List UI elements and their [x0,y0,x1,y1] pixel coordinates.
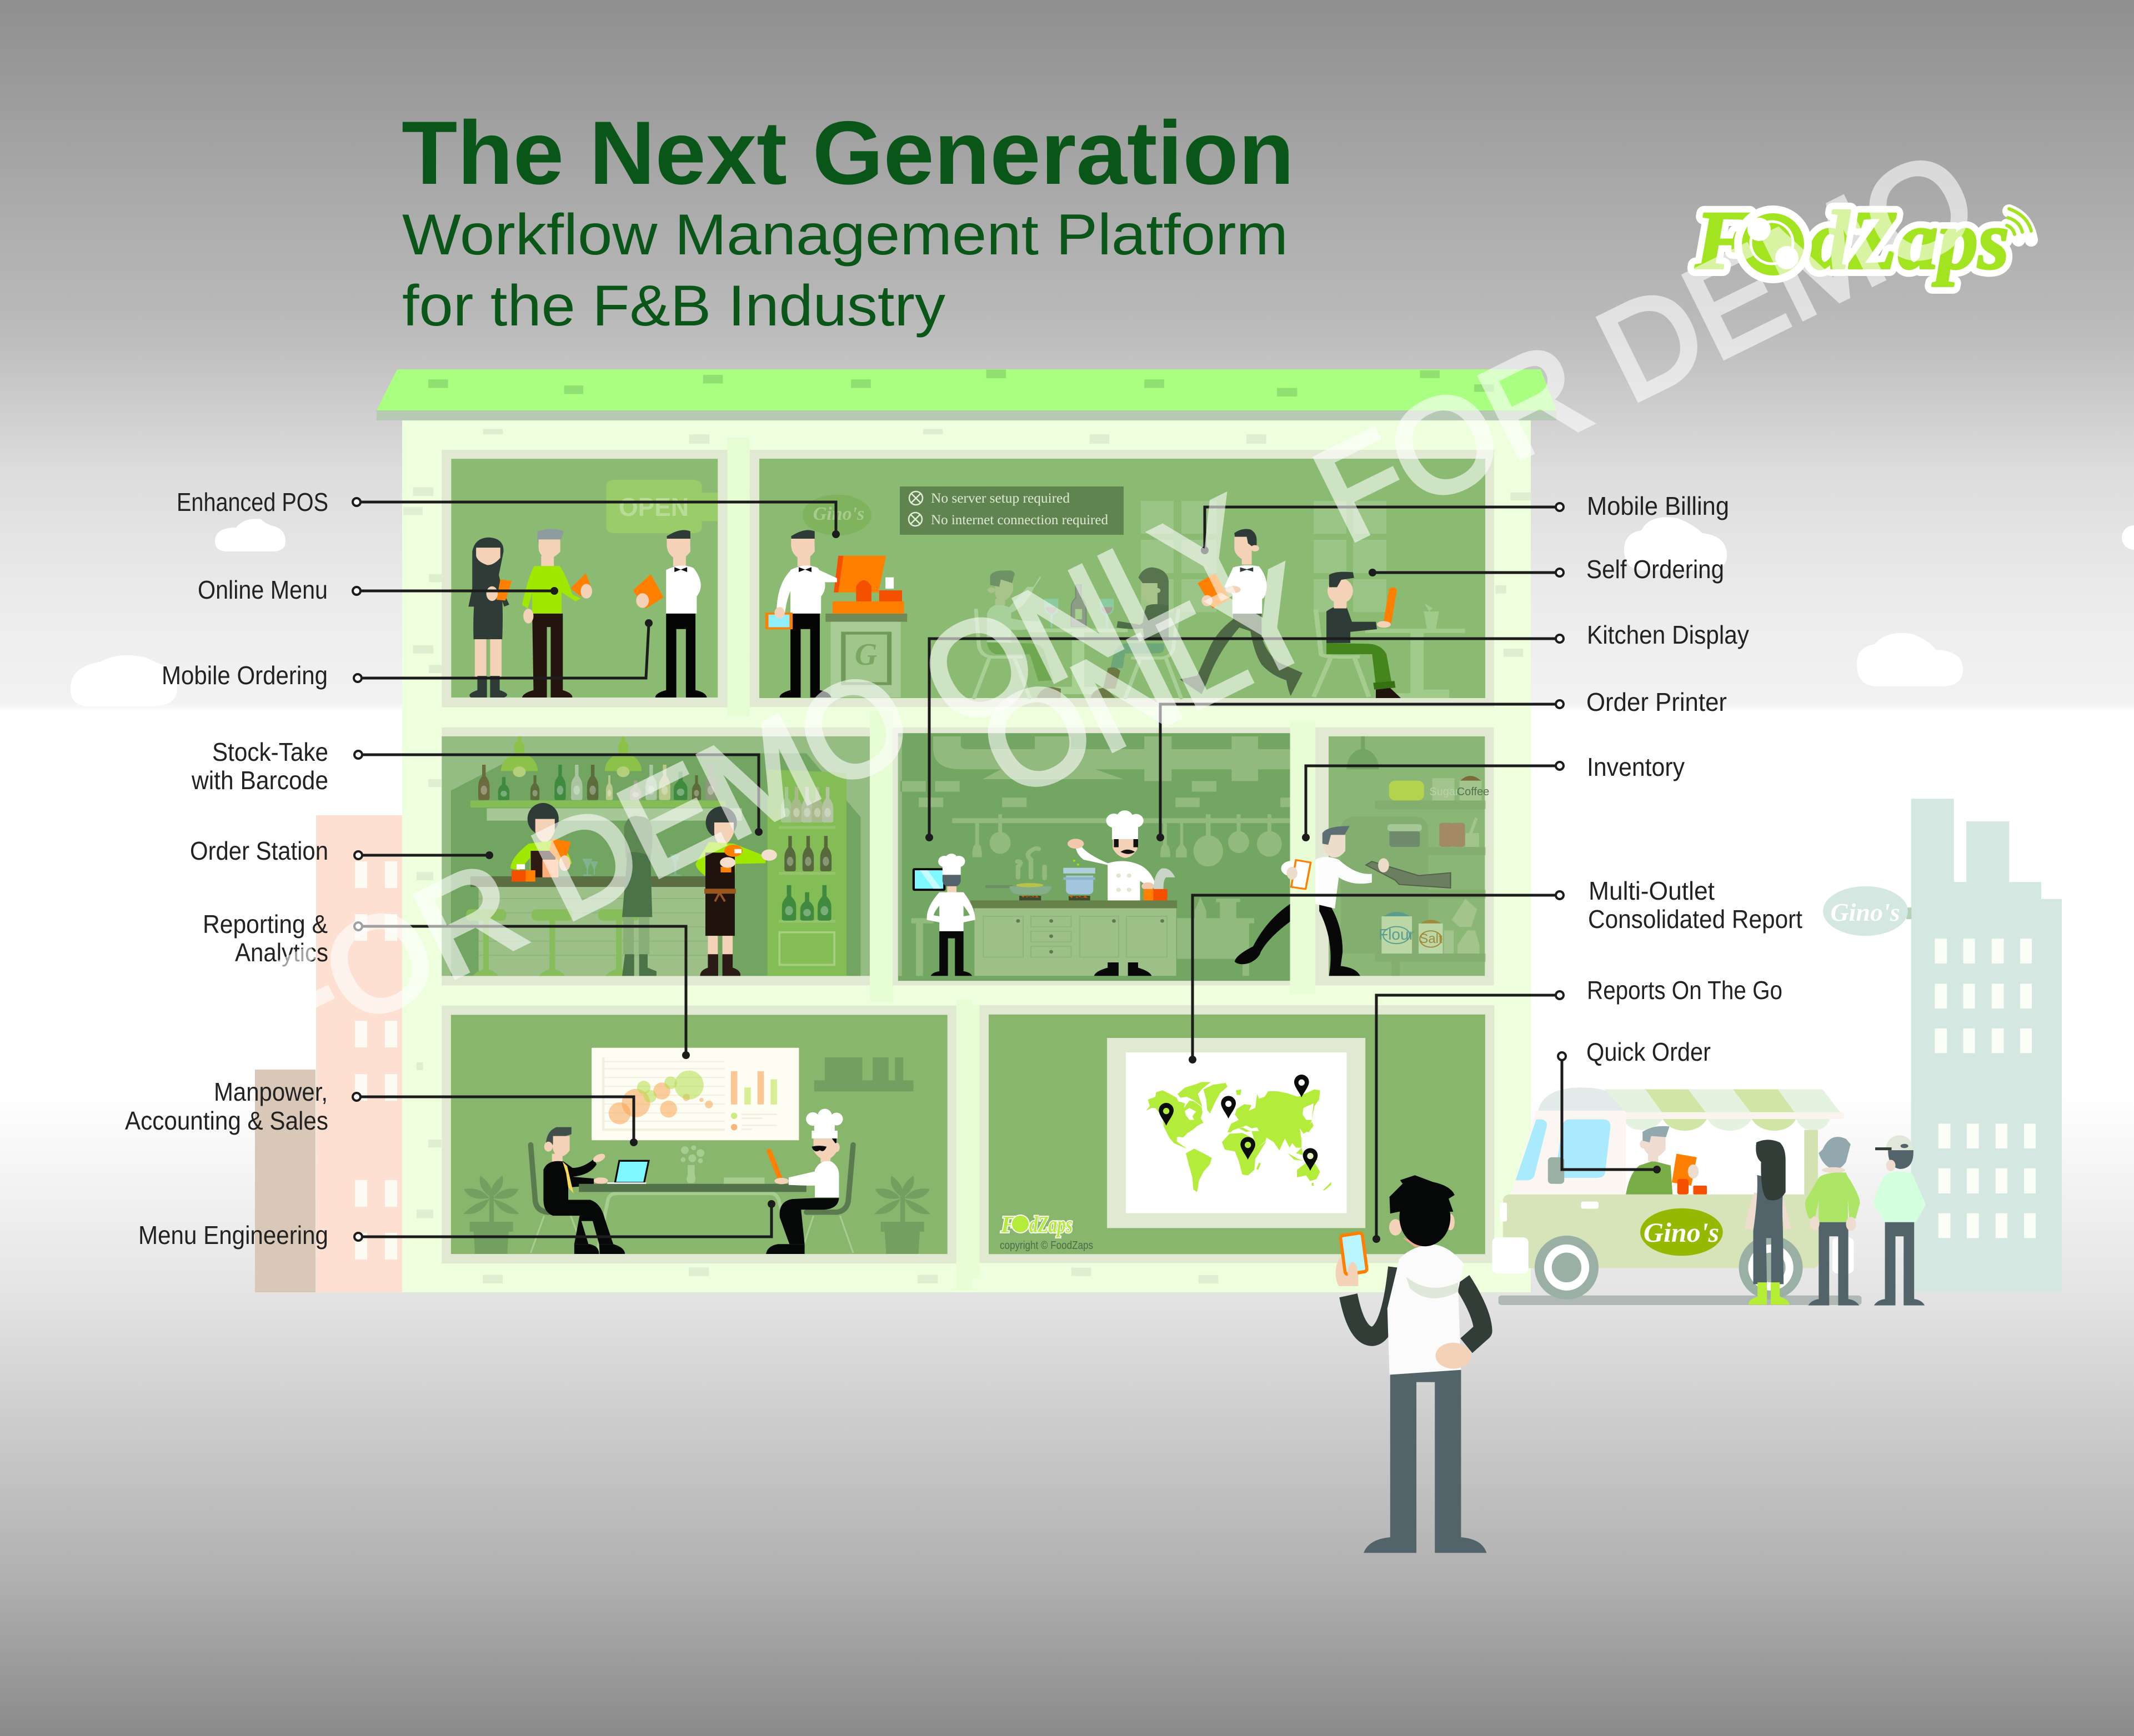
stock-taking man [1235,826,1451,976]
notice text [909,491,1108,528]
logo lettering: F [1695,194,1751,287]
truck interior [1626,1118,1804,1195]
logo lettering: dZaps [1809,194,2009,287]
watermark: FOR DEMO [1294,122,1997,570]
logo O emblem [1738,209,1808,279]
seated self-ordering customer [1314,572,1465,698]
gino's round sign [803,495,871,535]
customer with cap [1873,1135,1926,1306]
panel: top-left room, front counter [442,438,750,716]
open sign board [606,480,718,533]
waitress with scanner [696,806,777,976]
room frame [442,727,870,985]
logo wifi arcs [2007,209,2031,234]
manager with laptop [543,1127,649,1254]
copyright note: copyright © FoodZaps [1000,1240,1093,1252]
chef with tablet [766,1108,843,1254]
room frame [442,1006,956,1263]
stock pot [1063,856,1095,900]
right labels: Reports On The Go [1587,976,1782,1005]
subtitle line one: Workflow Management Platform [402,203,1288,267]
world map [1146,1075,1331,1192]
right labels: Mobile Billing [1587,491,1729,520]
left labels [125,488,328,1250]
pan on stove [985,883,1051,900]
cashier waiter [767,530,837,698]
counter monogram: G [855,638,877,672]
truck sign text: Gino's [1644,1217,1719,1248]
chef at kitchen display [913,854,975,976]
continents [1146,1082,1331,1192]
right labels: Quick Order [1586,1037,1711,1066]
analytics board [592,1048,799,1140]
pantry labels [1379,786,1489,946]
shelf bottles [478,765,717,800]
right background building [1823,799,2062,1292]
diner left [987,570,1061,698]
left labels: Stock-Take [212,737,328,766]
room frame [442,450,727,708]
left labels: Online Menu [198,575,328,604]
POS station and waiters [767,495,907,698]
hood shade [1406,1277,1458,1298]
watermark: FOR DEMO ONLY [229,469,1280,1088]
cab [1511,1111,1626,1195]
map pins [1159,1075,1318,1171]
customer man [522,529,592,698]
mini logo: dZaps [1029,1212,1073,1238]
right labels: Self Ordering [1586,555,1724,584]
customer woman [468,538,512,698]
notice text: No internet connection required [931,513,1108,528]
room frame [979,1005,1494,1263]
head [1389,1175,1455,1247]
hand on hip [1436,1343,1471,1369]
left labels: Order Station [190,836,328,865]
truck body [1503,1195,1819,1268]
FoodZaps logo [1695,194,2031,287]
wheels [1535,1236,1803,1300]
clouds [71,517,2134,706]
flower vase [680,1145,704,1183]
right labels: Order Printer [1586,688,1727,716]
left labels: Analytics [235,938,328,967]
food truck [1492,1087,1862,1305]
left labels: with Barcode [191,766,328,795]
cheese, sugar and coffee [1389,776,1482,800]
left labels: Enhanced POS [177,488,328,516]
title: The Next Generation [402,103,1294,203]
awning [1605,1089,1844,1196]
dining table [1029,629,1128,694]
pantry labels: Sugar [1429,786,1459,798]
window panes [1141,501,1386,612]
left background buildings [255,815,403,1292]
drink fridge [768,769,846,976]
woman customer [1745,1140,1791,1304]
table [597,1177,793,1253]
sleeves [1349,1267,1483,1346]
foreground man with phone [1336,1175,1486,1553]
wall bricks [403,429,1531,1283]
back wall [451,754,860,976]
raised hand [1336,1256,1358,1286]
pantry labels: Flour [1379,926,1414,943]
bar shelf [470,800,742,821]
POS terminal [833,556,904,614]
trousers [1364,1370,1486,1553]
truck sign [1640,1208,1723,1256]
utensil rail [952,814,1290,866]
panel: bar room [442,711,893,1001]
queueing customers [1745,1135,1926,1306]
head chef [1068,810,1156,976]
hood and pipes [933,736,1290,781]
hoodie torso [1387,1245,1464,1374]
bar counter front [470,876,711,976]
bartender [510,803,572,882]
counter [825,614,907,698]
logo white outline [1695,194,2009,287]
wine glasses [1044,599,1114,628]
left labels: Accounting & Sales [125,1106,328,1135]
pantry labels: Coffee [1457,786,1489,798]
back cabinet [911,897,1254,976]
diner chairs [974,610,1181,698]
wine glasses [583,854,680,876]
logo white outline: dZaps [1809,194,2009,287]
right labels: Consolidated Report [1588,905,1802,934]
order printer [1144,868,1175,900]
mini logo: F [1000,1212,1016,1238]
gino's sign text: Gino's [813,504,864,524]
left labels: Mobile Ordering [162,661,328,690]
vendor [1626,1126,1707,1195]
leader lines [357,502,1657,1239]
waiter with menu [633,530,707,698]
leader end dots [485,530,1661,1243]
panel: meeting room [442,1000,972,1290]
flour, salt and shelf items [1381,899,1479,954]
logo lettering [1695,194,2009,287]
open sign text: OPEN [619,493,689,521]
customer from behind [622,816,657,976]
notice box [900,486,1124,535]
panel: kitchen [893,721,1315,994]
mini logo [1000,1212,1073,1238]
left labels: Menu Engineering [138,1221,328,1250]
bar stools [466,909,639,976]
running waiter [1180,529,1303,696]
potted plants [463,1176,930,1254]
logo wifi arcs outline [2007,211,2031,240]
inland seas [1176,1103,1314,1143]
right labels [1586,491,1802,1066]
right labels: Kitchen Display [1587,620,1749,649]
lamps [501,736,642,777]
subtitle line two: for the F&B Industry [402,274,945,338]
watermark: ONLY [959,539,1338,826]
panel: top-right room, POS and dining [750,450,1494,707]
wine bottle [1071,585,1086,626]
notice text: No server setup required [931,491,1070,506]
chairs [530,1145,853,1253]
panel: multi-outlet map room [972,1005,1494,1278]
grey-haired customer [1805,1137,1860,1306]
pendant lamp [1346,736,1379,769]
pantry shelves [1341,800,1486,976]
right labels: Multi-Outlet [1589,876,1715,905]
pantry labels: Salt [1419,931,1442,946]
building facade [402,420,1531,1292]
phone [1340,1233,1367,1275]
room frame [893,727,1290,985]
left labels: Manpower, [214,1077,328,1106]
room interior [451,459,718,698]
seated diners faded [974,568,1181,698]
roof [377,369,1556,420]
jars and bottles [1387,817,1479,847]
left labels: Reporting & [203,910,328,939]
room interior [759,459,1485,698]
counter [970,900,1177,976]
right labels: Inventory [1587,752,1685,781]
panel: pantry [1235,727,1494,985]
truck lights and bumpers [1492,1202,1854,1273]
map frame [1107,1038,1365,1228]
diner right [1090,568,1169,698]
back shelf silhouette [814,1057,913,1091]
steam [1017,849,1045,878]
thumb [1347,1262,1357,1285]
leader rings [353,498,1566,1241]
outlet sign text: Gino's [1830,898,1900,926]
watermark [229,122,1997,1088]
logo white outline: F [1695,194,1751,287]
